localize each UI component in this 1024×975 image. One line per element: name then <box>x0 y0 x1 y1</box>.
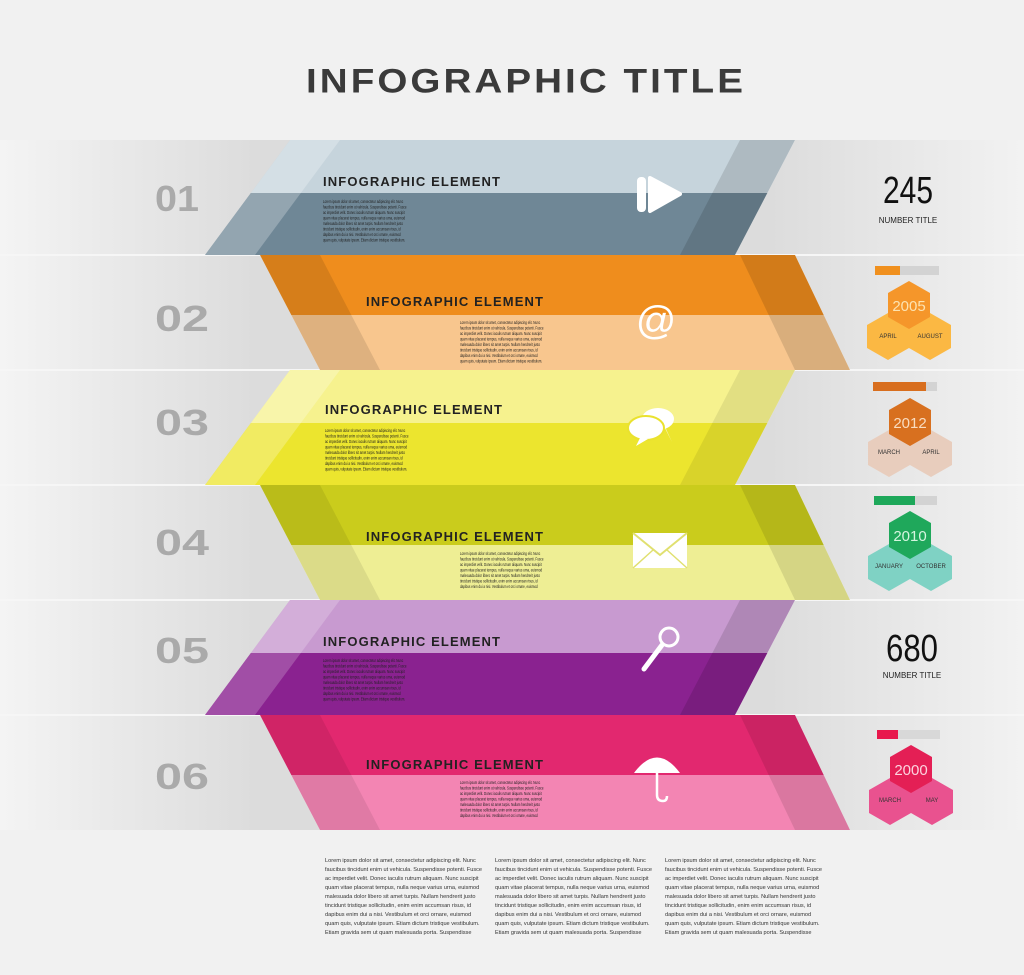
band 2 <box>250 255 860 370</box>
body texts: malesuada dolor libero sit amet turpis. Nullam hendrerit justo <box>325 449 405 455</box>
body texts: ac imperdiet velit. Donec iaculis rutrum aliquam. Nunc suscipit <box>323 668 405 674</box>
icon: play <box>637 177 680 212</box>
body texts: dapibus enim dui a nisi. Vestibulum et orci ornare, euismod <box>460 352 538 358</box>
body texts: malesuada dolor libero sit amet turpis. Nullam hendrerit justo <box>460 572 540 578</box>
step numbers <box>155 178 209 797</box>
bottom text columns: Etiam gravida sem ut quam malesuada porta. Suspendisse <box>325 930 471 936</box>
bottom text columns: dapibus enim dui a nisi. Vestibulum et orci ornare, euismod <box>665 912 811 918</box>
title: INFOGRAPHIC TITLE <box>306 61 746 100</box>
bottom text columns: quam vitae placerat tempus, nulla neque varius urna, euismod <box>325 885 479 891</box>
body texts: ac imperdiet velit. Donec iaculis rutrum aliquam. Nunc suscipit <box>460 790 542 796</box>
headings: INFOGRAPHIC ELEMENT <box>323 174 500 189</box>
step numbers: 01 <box>155 178 199 219</box>
hex group 2012 <box>868 382 952 477</box>
body texts: faucibus tincidunt enim ut vehicula. Suspendisse potenti. Fusce <box>460 785 544 791</box>
body texts: ac imperdiet velit. Donec iaculis rutrum aliquam. Nunc suscipit <box>460 561 542 567</box>
icon: umbrella <box>634 758 680 801</box>
headings <box>323 174 543 772</box>
body texts: tincidunt tristique sollicitudin, enim enim accumsan risus, id <box>460 578 538 584</box>
body texts: quam vitae placerat tempus, nulla neque varius urna, euismod <box>323 674 405 680</box>
stat: 680: 680 <box>886 628 938 670</box>
body texts: faucibus tincidunt enim ut vehicula. Suspendisse potenti. Fusce <box>325 433 409 439</box>
body texts: quam quis, vulputate ipsum. Etiam dictum tristique vestibulum. <box>323 237 405 243</box>
band 1 <box>200 140 800 255</box>
headings: INFOGRAPHIC ELEMENT <box>323 634 500 649</box>
hex group 2005: AUGUST <box>917 334 943 340</box>
step numbers: 02 <box>155 298 209 339</box>
stat: 245: NUMBER TITLE <box>879 216 937 225</box>
bottom text columns: ac imperdiet velit. Donec iaculis rutrum aliquam. Nunc suscipit <box>665 876 819 882</box>
hex group 2010: JANUARY <box>875 564 903 570</box>
icon: magnifier <box>644 628 678 669</box>
bottom text columns: faucibus tincidunt enim ut vehicula. Suspendisse potenti. Fusce <box>665 867 822 873</box>
step numbers: 06 <box>155 756 209 797</box>
hex group 2012: 2012 <box>893 415 927 432</box>
hex group 2010: 2010 <box>893 528 927 545</box>
bottom text columns: tincidunt tristique sollicitudin, enim enim accumsan risus, id <box>325 903 471 909</box>
hex group 2000: MAY <box>926 798 938 804</box>
bottom text columns: ac imperdiet velit. Donec iaculis rutrum aliquam. Nunc suscipit <box>325 876 479 882</box>
body texts: dapibus enim dui a nisi. Vestibulum et orci ornare, euismod <box>460 583 538 589</box>
body texts: faucibus tincidunt enim ut vehicula. Suspendisse potenti. Fusce <box>460 556 544 562</box>
body texts: malesuada dolor libero sit amet turpis. Nullam hendrerit justo <box>323 679 403 685</box>
bottom text columns: Lorem ipsum dolor sit amet, consectetur adipiscing elit. Nunc <box>495 858 646 864</box>
hex group 2012: MARCH <box>878 450 900 456</box>
body texts: quam vitae placerat tempus, nulla neque varius urna, euismod <box>460 567 542 573</box>
body texts: Lorem ipsum dolor sit amet, consectetur adipiscing elit. Nunc <box>323 657 403 663</box>
bottom text columns: faucibus tincidunt enim ut vehicula. Suspendisse potenti. Fusce <box>495 867 652 873</box>
body texts: Lorem ipsum dolor sit amet, consectetur adipiscing elit. Nunc <box>323 198 403 204</box>
headings: INFOGRAPHIC ELEMENT <box>366 757 543 772</box>
body texts: faucibus tincidunt enim ut vehicula. Suspendisse potenti. Fusce <box>323 663 407 669</box>
body texts: faucibus tincidunt enim ut vehicula. Suspendisse potenti. Fusce <box>323 204 407 210</box>
step numbers: 03 <box>155 402 209 443</box>
hex group 2005: 2005 <box>892 298 926 315</box>
body texts <box>323 198 544 818</box>
hex group 2010 <box>868 496 952 591</box>
icon: envelope <box>633 533 687 568</box>
stat: 245 <box>879 170 937 225</box>
bottom text columns: malesuada dolor libero sit amet turpis. Nullam hendrerit justo <box>665 894 815 900</box>
body texts: Lorem ipsum dolor sit amet, consectetur adipiscing elit. Nunc <box>325 427 405 433</box>
bottom text columns: tincidunt tristique sollicitudin, enim enim accumsan risus, id <box>495 903 641 909</box>
body texts: malesuada dolor libero sit amet turpis. Nullam hendrerit justo <box>460 341 540 347</box>
bottom text columns: Lorem ipsum dolor sit amet, consectetur adipiscing elit. Nunc <box>325 858 476 864</box>
hex group 2010: OCTOBER <box>916 564 946 570</box>
body texts: dapibus enim dui a nisi. Vestibulum et orci ornare, euismod <box>323 231 401 237</box>
icon: speech bubbles <box>628 408 674 446</box>
body texts: quam quis, vulputate ipsum. Etiam dictum tristique vestibulum. <box>323 696 405 702</box>
bottom text columns: dapibus enim dui a nisi. Vestibulum et orci ornare, euismod <box>325 912 471 918</box>
headings: INFOGRAPHIC ELEMENT <box>366 294 543 309</box>
body texts: quam vitae placerat tempus, nulla neque varius urna, euismod <box>460 336 542 342</box>
body texts: faucibus tincidunt enim ut vehicula. Suspendisse potenti. Fusce <box>460 325 544 331</box>
hex group 2005 <box>867 266 951 360</box>
bottom text columns: faucibus tincidunt enim ut vehicula. Suspendisse potenti. Fusce <box>325 867 482 873</box>
body texts: quam quis, vulputate ipsum. Etiam dictum tristique vestibulum. <box>325 466 407 472</box>
stat: 680 <box>883 628 941 680</box>
step numbers: 04 <box>155 522 209 563</box>
body texts: tincidunt tristique sollicitudin, enim enim accumsan risus, id <box>460 347 538 353</box>
body texts: tincidunt tristique sollicitudin, enim enim accumsan risus, id <box>323 226 401 232</box>
hex group 2012: APRIL <box>922 450 940 456</box>
body texts: malesuada dolor libero sit amet turpis. Nullam hendrerit justo <box>460 801 540 807</box>
body texts: malesuada dolor libero sit amet turpis. Nullam hendrerit justo <box>323 220 403 226</box>
stat: 680: NUMBER TITLE <box>883 671 941 680</box>
hex group 2000: MARCH <box>879 798 901 804</box>
bottom text columns: Etiam gravida sem ut quam malesuada porta. Suspendisse <box>495 930 641 936</box>
headings: INFOGRAPHIC ELEMENT <box>325 402 502 417</box>
body texts: quam vitae placerat tempus, nulla neque varius urna, euismod <box>323 215 405 221</box>
body texts: tincidunt tristique sollicitudin, enim enim accumsan risus, id <box>325 455 403 461</box>
bottom text columns <box>325 858 822 936</box>
bottom text columns: dapibus enim dui a nisi. Vestibulum et orci ornare, euismod <box>495 912 641 918</box>
band 3 <box>200 370 800 485</box>
body texts: dapibus enim dui a nisi. Vestibulum et orci ornare, euismod <box>460 812 538 818</box>
bottom text columns: quam quis, vulputate ipsum. Etiam dictum tristique vestibulum. <box>325 921 480 927</box>
icon: at sign: @ <box>636 299 676 343</box>
bottom text columns: Lorem ipsum dolor sit amet, consectetur adipiscing elit. Nunc <box>665 858 816 864</box>
body texts: quam quis, vulputate ipsum. Etiam dictum tristique vestibulum. <box>460 358 542 364</box>
bottom text columns: quam vitae placerat tempus, nulla neque varius urna, euismod <box>495 885 649 891</box>
body texts: ac imperdiet velit. Donec iaculis rutrum aliquam. Nunc suscipit <box>323 209 405 215</box>
body texts: tincidunt tristique sollicitudin, enim enim accumsan risus, id <box>323 685 401 691</box>
body texts: Lorem ipsum dolor sit amet, consectetur adipiscing elit. Nunc <box>460 319 540 325</box>
hex group 2000 <box>869 730 953 825</box>
body texts: ac imperdiet velit. Donec iaculis rutrum aliquam. Nunc suscipit <box>325 438 407 444</box>
bottom text columns: quam vitae placerat tempus, nulla neque varius urna, euismod <box>665 885 819 891</box>
body texts: dapibus enim dui a nisi. Vestibulum et orci ornare, euismod <box>325 460 403 466</box>
hex group 2000: 2000 <box>894 762 928 779</box>
body texts: Lorem ipsum dolor sit amet, consectetur adipiscing elit. Nunc <box>460 550 540 556</box>
hex group 2005: APRIL <box>879 334 897 340</box>
body texts: dapibus enim dui a nisi. Vestibulum et orci ornare, euismod <box>323 690 401 696</box>
body texts: quam vitae placerat tempus, nulla neque varius urna, euismod <box>325 444 407 450</box>
bottom text columns: tincidunt tristique sollicitudin, enim enim accumsan risus, id <box>665 903 811 909</box>
band 6 <box>250 715 860 830</box>
bottom text columns: ac imperdiet velit. Donec iaculis rutrum aliquam. Nunc suscipit <box>495 876 649 882</box>
bottom text columns: quam quis, vulputate ipsum. Etiam dictum tristique vestibulum. <box>665 921 820 927</box>
bottom text columns: quam quis, vulputate ipsum. Etiam dictum tristique vestibulum. <box>495 921 650 927</box>
body texts: Lorem ipsum dolor sit amet, consectetur adipiscing elit. Nunc <box>460 779 540 785</box>
body texts: quam vitae placerat tempus, nulla neque varius urna, euismod <box>460 796 542 802</box>
bottom text columns: malesuada dolor libero sit amet turpis. Nullam hendrerit justo <box>325 894 475 900</box>
step numbers: 05 <box>155 630 209 671</box>
body texts: ac imperdiet velit. Donec iaculis rutrum aliquam. Nunc suscipit <box>460 330 542 336</box>
band 4 <box>250 485 860 600</box>
bottom text columns: malesuada dolor libero sit amet turpis. Nullam hendrerit justo <box>495 894 645 900</box>
band 5 <box>200 600 800 715</box>
headings: INFOGRAPHIC ELEMENT <box>366 529 543 544</box>
body texts: tincidunt tristique sollicitudin, enim enim accumsan risus, id <box>460 807 538 813</box>
stat: 245: 245 <box>883 170 933 212</box>
bottom text columns: Etiam gravida sem ut quam malesuada porta. Suspendisse <box>665 930 811 936</box>
